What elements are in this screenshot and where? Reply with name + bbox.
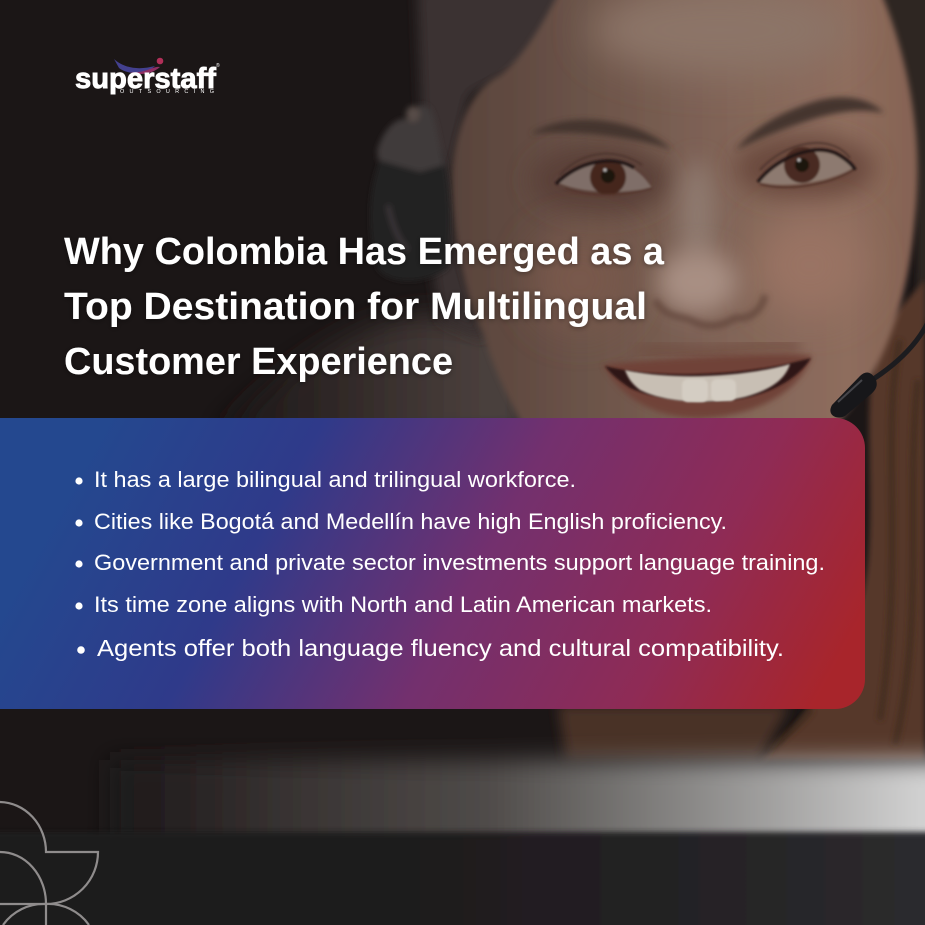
panel: reasons list <box>0 418 865 709</box>
eye sockets shading <box>530 145 670 215</box>
headset microphone boom <box>830 318 925 418</box>
dark monitor foreground <box>0 832 925 925</box>
decorative outline shapes bottom left <box>0 802 98 925</box>
hair top <box>417 0 600 340</box>
nose <box>655 250 765 326</box>
nose bridge highlight <box>679 160 715 270</box>
mouth <box>603 354 812 418</box>
bullet list <box>75 467 825 661</box>
title: Customer Experience <box>64 341 453 383</box>
logo registered mark: ® <box>216 62 220 69</box>
logo swoosh <box>114 59 155 73</box>
blurred white foreground band <box>110 760 925 860</box>
teeth highlights <box>682 379 736 402</box>
upper lip shadow <box>640 346 800 352</box>
logo tagline: OUTSOURCING <box>120 89 214 95</box>
item 5: Agents offer both language fluency and cultural compatibility. <box>97 635 784 661</box>
lower lip <box>603 354 812 418</box>
right brow <box>736 97 884 150</box>
item 2: Cities like Bogotá and Medellín have high English proficiency. <box>94 509 727 534</box>
hair streaks <box>770 340 918 750</box>
title: Why Colombia Has Emerged as a <box>64 231 665 273</box>
logo: superstaff outsourcing <box>75 58 220 95</box>
blurred shoulder <box>220 315 530 440</box>
mouth opening <box>605 358 811 402</box>
hair top right <box>870 0 925 320</box>
hair right of the panel <box>760 280 925 760</box>
forehead tone <box>590 0 850 75</box>
neck <box>558 705 790 760</box>
item 4: Its time zone aligns with North and Latin American markets. <box>94 592 712 617</box>
cheek tones <box>755 215 865 315</box>
logo wordmark: superstaff <box>75 63 216 95</box>
item 1: It has a large bilingual and trilingual workforce. <box>94 467 576 492</box>
left eye <box>556 154 652 195</box>
logo dot <box>157 58 163 64</box>
teeth <box>625 364 790 402</box>
headset earcup <box>370 105 450 281</box>
item 3: Government and private sector investments support language training. <box>94 550 825 575</box>
title <box>64 231 665 383</box>
title: Top Destination for Multilingual <box>64 286 647 328</box>
face <box>452 0 918 430</box>
right eye <box>758 143 855 187</box>
left brow <box>530 120 672 150</box>
